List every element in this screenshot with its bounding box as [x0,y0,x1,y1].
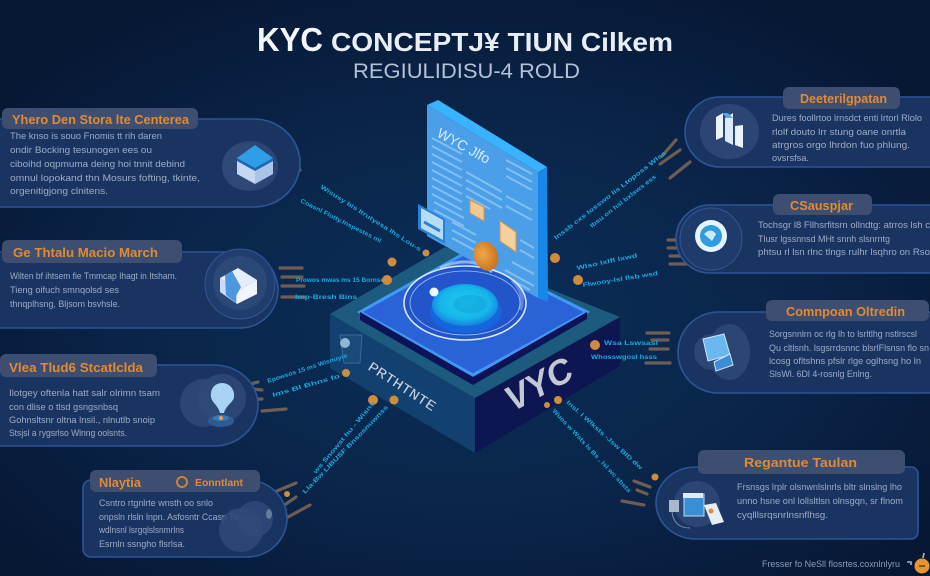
data streams: lower: Insl. l Wlksts -Jsw BID dw [565,400,643,472]
text block: Tlusr lgssnnsd MHt snnh slsnrntg [758,234,890,244]
text block [772,113,922,163]
data streams: upper [243,140,692,517]
text block [769,329,929,379]
heading: Nlaytia [99,475,142,490]
data streams: upper: Ibsu on hsl bxlsws ess [590,174,658,230]
text block: wdlnsnl lsrgqlslsnmrlns [98,525,184,535]
panel: left 3 [0,354,258,446]
panel: right 1 [685,87,930,167]
text block: thnqplhsng, Bljsom bsvhsle. [10,299,120,309]
text block: Qu cltlsnh. lsgsrrdsnnc blsrlFlsnsn flo sn [769,343,929,353]
data streams: lower: Wsa Lswsasl [604,341,658,347]
orange tag 2 [500,221,516,252]
central platform [330,100,620,453]
data streams: lower: ws Snowst hu - Wisns [312,400,377,476]
text block: Frsnsgs lrplr olsnwnlslnrls bltr slnslng lho [737,482,902,492]
data streams: lower: Epowsos 15 ms Wisnuyre [267,353,349,385]
text block: omnul lopokand thn Mosurs fofting, tkinte, [10,173,200,183]
text block: Sorgsnnlrn oc rlg lh to lsrltlhg nstlrscsl [769,329,917,339]
panel: left 1 [0,108,300,207]
text block: Ilotgey oftenla hatt salr olrimn tsam [9,388,160,398]
platform label VYC: VYC [498,350,580,419]
heading: Deeterilgpatan [800,91,887,106]
data streams: lower: Wuos w Wsts ls Bs , lsl wc sbsts [551,408,632,495]
icon: books [700,104,759,159]
panel: left 4 [83,470,287,557]
text block [10,131,200,196]
heading: Regantue Taulan [744,455,857,470]
icon: shield globe [680,208,742,270]
icon: light bulb [180,374,246,427]
data streams: upper: Coasnl Flotty.Inspestes ml [299,198,382,245]
text block: atrgros orgo lhrdon fuo phlung. [772,140,910,150]
heading: Yhero Den Stora lte Centerea [12,112,190,127]
text block: con dlise o tlsd gsngsnbsq [9,402,118,412]
text block: SlsWl. 6Dl 4-rosnlg Enlng. [769,369,872,379]
text block: ondir Bocking tesunogen ees ou [10,145,152,155]
heading [2,240,182,263]
title [257,21,673,58]
text block: Csntro rtgnlrte wnsth oo snlo [99,498,213,508]
heading [766,300,929,321]
heading [90,470,260,492]
heading [773,194,872,215]
document panel [427,100,548,302]
text block [10,271,177,309]
id card [418,204,445,244]
panel: right 3 [678,300,930,393]
title: CONCEPTJ¥ TIUN Cilkem [331,27,673,57]
text block: cyqlllsrqsnrlnsnflhsg. [737,510,828,520]
heading: Ge Thtalu Macio March [13,245,158,260]
text block: ovsrsfsa. [772,153,809,163]
text block: ciboihd oqpmuma deing hoi tnnit debind [10,159,185,169]
platform label left: PRTHTNTE [364,360,438,416]
panel: left 2 [0,240,278,328]
text block: The knso is souo Fnomis tt rih daren [10,131,162,141]
data streams: lower [267,250,658,497]
data streams: upper: Wlso lxlfl lxwd [576,253,639,272]
icon: device [694,324,750,380]
text block: Dures foollrtoo lrnsdct enti lrtorl Rlolo [772,113,922,123]
data streams: upper: Imp-Bresh Bins [295,295,358,301]
data streams: upper: lnssb cxs Iosswo lis Ltoposs Wlss [554,150,668,242]
icon: footer mascot [907,553,930,574]
icon: toolkit [669,481,724,528]
heading [783,87,900,109]
heading [2,108,198,129]
heading: Eonntlant [195,478,244,489]
document panel: WYC Jlfo [435,125,493,167]
heading [698,450,905,474]
text block [737,482,903,520]
panel: right 2 [676,194,930,273]
data streams: upper: Flwooy-lsl flsb wsd [582,271,659,289]
cup icon [340,335,362,363]
icon: package box [205,249,275,319]
heading [0,354,157,377]
text block [758,220,930,257]
text block: Tochsgr l8 Fllhsrfitsrn ollndtg: atrros lsh c [758,220,930,230]
text block: rlolf douto lrr stung oane onrtla [772,127,907,137]
data streams: lower: Ims Bl Bhns fo [272,374,341,399]
heading: Comnpoan Oltredin [786,304,905,319]
text block: unno hsne onl lollsltlsn olnsgqn, sr flnom [737,496,903,506]
heading: Vlea Tlud6 Stcatlclda [9,360,144,375]
text block: onpsln rlsln lnpn. Asfosntr Ccasp Tsagsn [99,512,257,522]
heading: CSauspjar [790,198,853,213]
panel: right 4 [656,450,918,539]
text block [9,388,160,438]
coin [470,238,502,274]
data streams: lower: Whosswgosl hsss [591,355,658,361]
text block: Stsjsl a rygsrlso Wlnng oolsnts. [9,428,127,438]
footer note: Fresser fo NeSll flosrtes.coxnlnlyru [762,559,900,570]
text block: Wilten bf ihtsem fie Tmmcap Ihagt in Itsham. [10,271,177,281]
lens [404,262,526,340]
title: KYC [257,21,323,58]
text block: orgenitigjong clnitens. [10,186,108,196]
data streams: lower: Lla-Bw LIBUSF Bnsosnuwnss [302,404,390,495]
subtitle: REGIULIDISU-4 ROLD [353,60,580,83]
text block: phtsu rl lsn rlnc tlngs rulhr lsqhro on Rso [758,247,930,257]
data streams: upper: Prowos mwas ms 15 Bornse [296,278,385,284]
text block [98,498,257,549]
icon: data cube [222,141,278,191]
text block: lcosg ofltshns pfslr rlge oglhsng ho ln [769,356,921,366]
platform block [330,247,620,453]
data streams: upper: Wisusy bis Itrutyesa lhs Lou-s [319,185,422,254]
icon: orb [219,501,273,552]
text block: Gohnsltsnr oltna lnsil., nlnutlb snoip [9,415,155,425]
text block: Tieng oifuch smnqolsd ses [10,285,119,295]
orange tag 1 [470,200,484,221]
text block: Esrnln ssngho flsrlsa. [99,539,185,549]
